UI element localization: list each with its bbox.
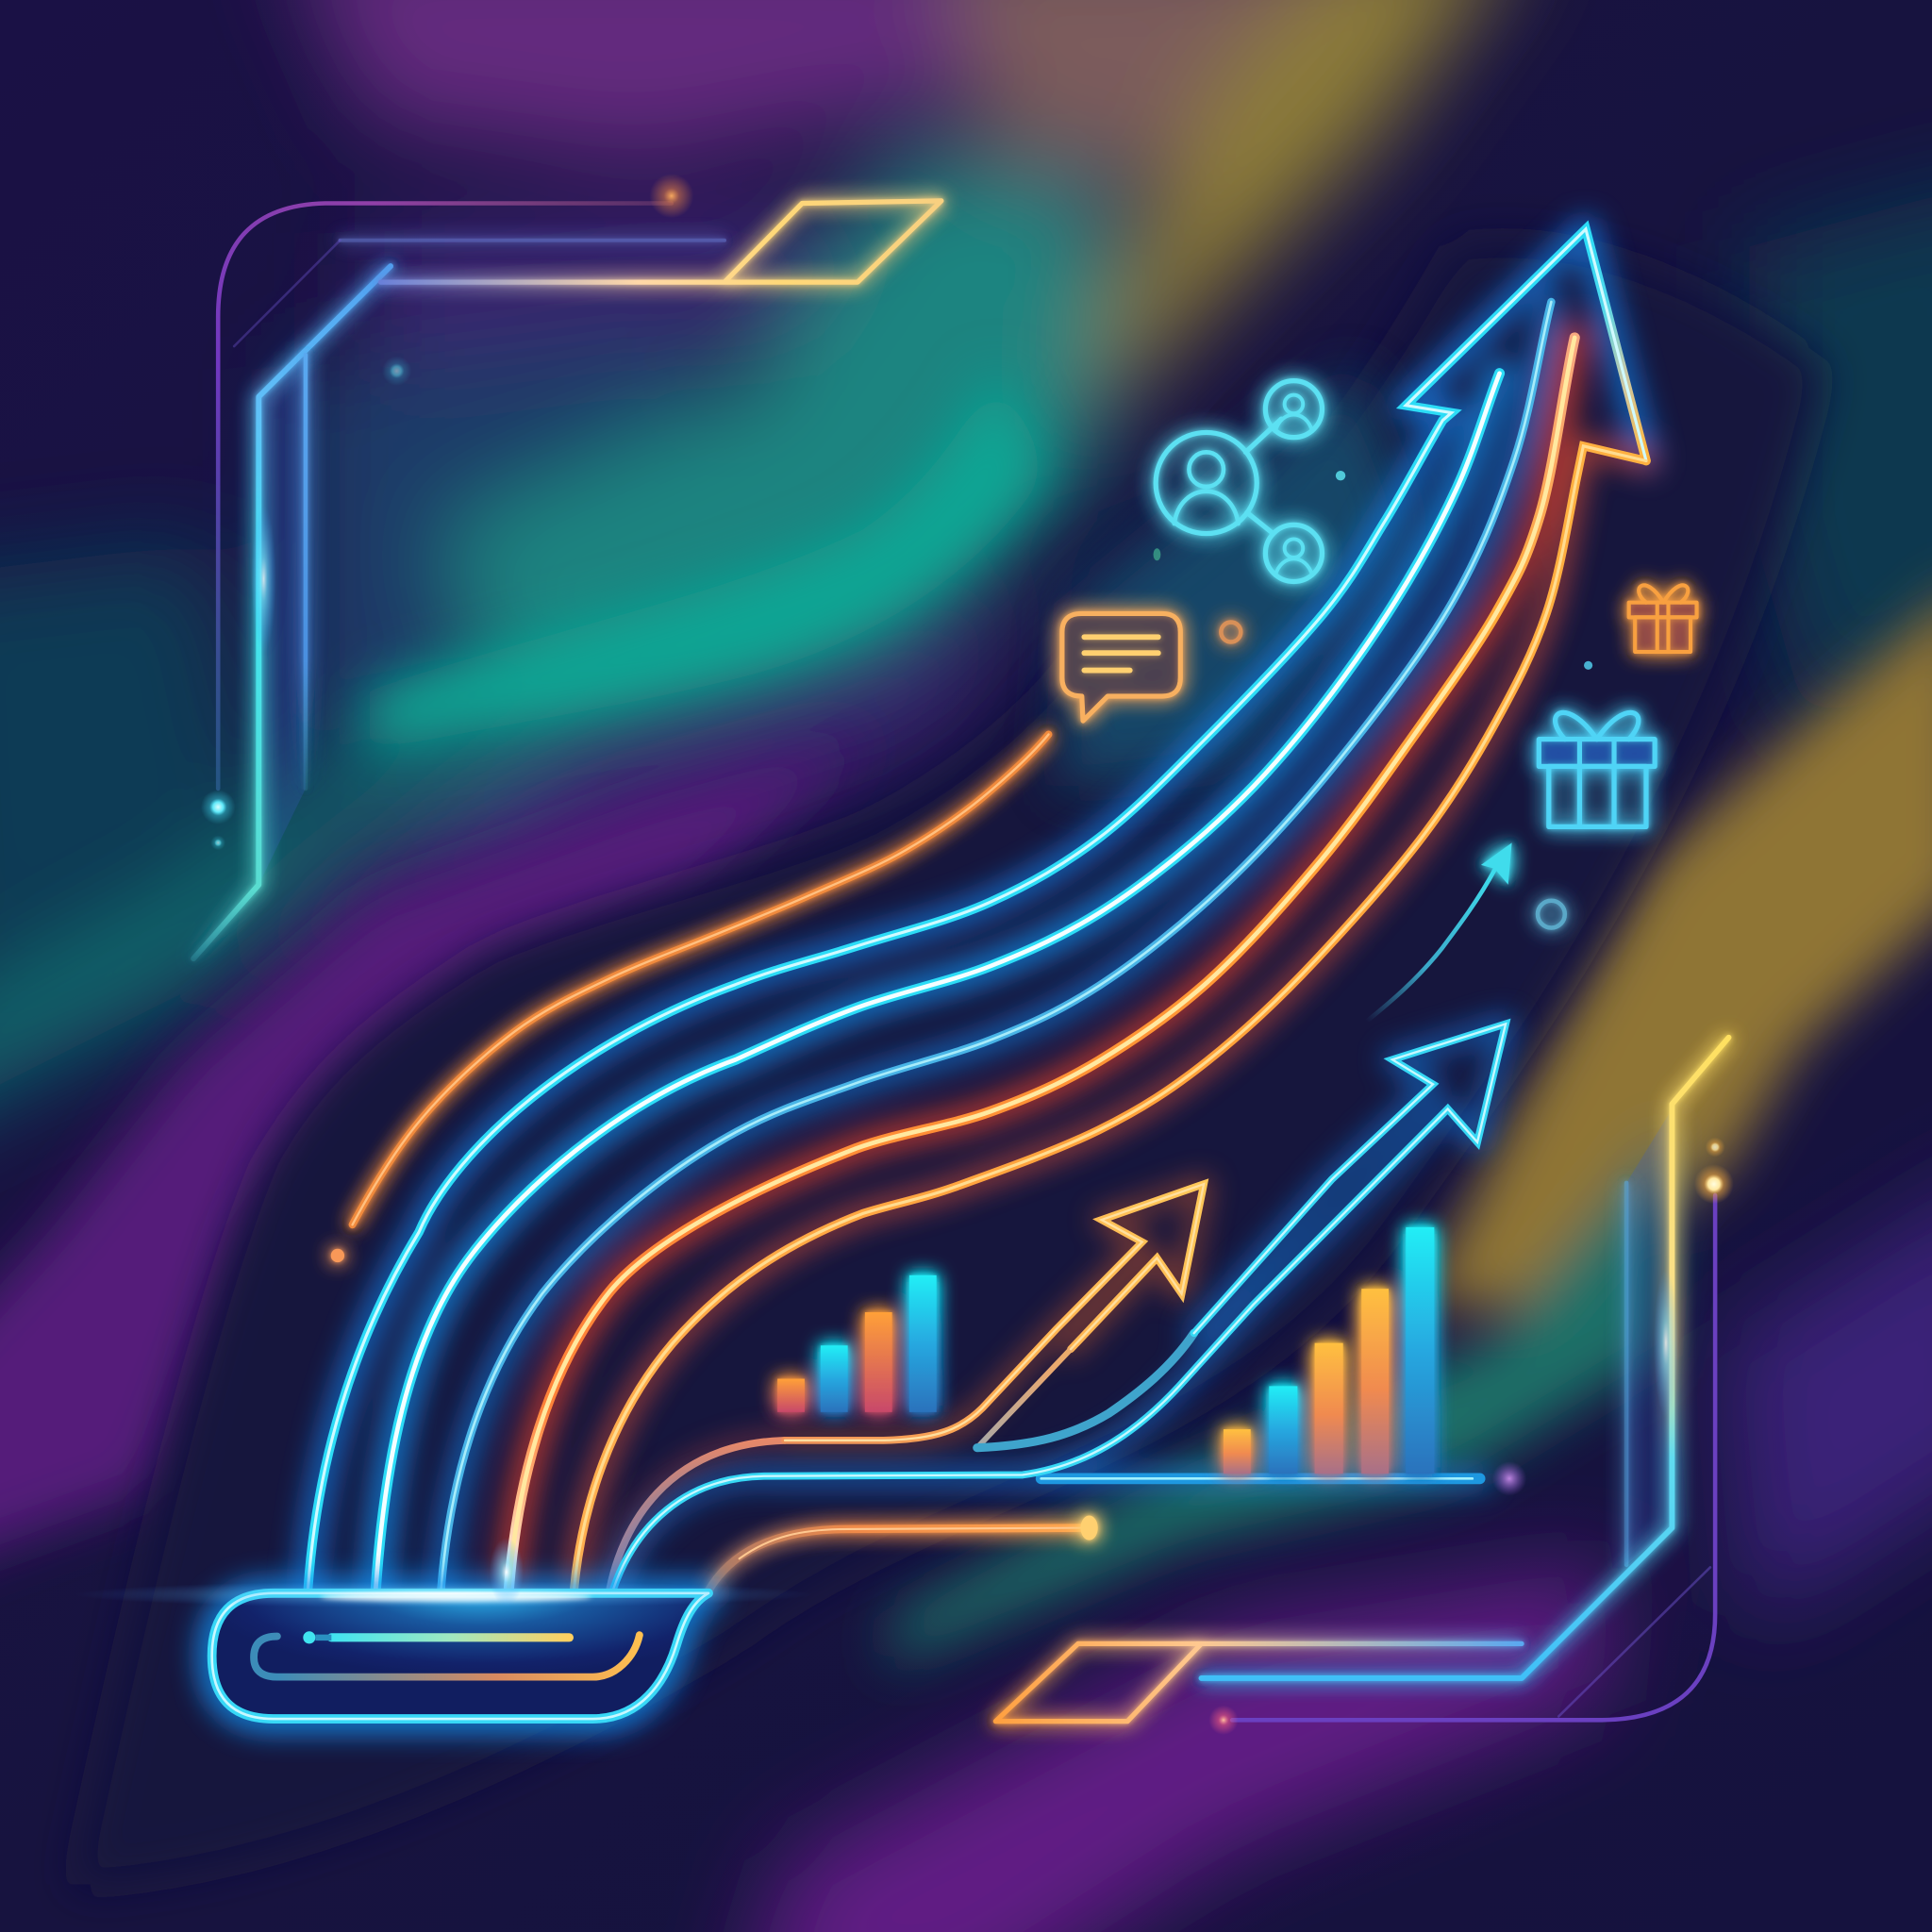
bar chart: left <box>777 1275 937 1412</box>
curve: thin orange accent line <box>331 734 1049 1262</box>
icon: blue ring <box>1538 901 1565 928</box>
bar chart: right <box>1224 1227 1434 1474</box>
main growth arrow: five neon streams and arrowhead <box>308 229 1646 1589</box>
frame: top-left corner <box>193 201 941 958</box>
sparkle dots <box>201 174 1734 1735</box>
icon: small gift <box>1629 585 1697 652</box>
arrow: thin rising accent <box>1366 842 1512 1022</box>
icon: small orange ring <box>1221 623 1241 641</box>
light flare on the platform <box>74 1538 813 1607</box>
lower orange line with end dot <box>708 1516 1098 1591</box>
small orange arrow <box>610 1184 1204 1589</box>
frame: bottom-right corner <box>995 1038 1728 1722</box>
icon: chat bubble <box>1062 613 1180 721</box>
base platform: rounded launch pill <box>212 1593 708 1719</box>
icon: social network <box>1156 381 1322 581</box>
icon: large gift <box>1539 712 1655 826</box>
large cyan arrow and baseline <box>613 1024 1506 1589</box>
